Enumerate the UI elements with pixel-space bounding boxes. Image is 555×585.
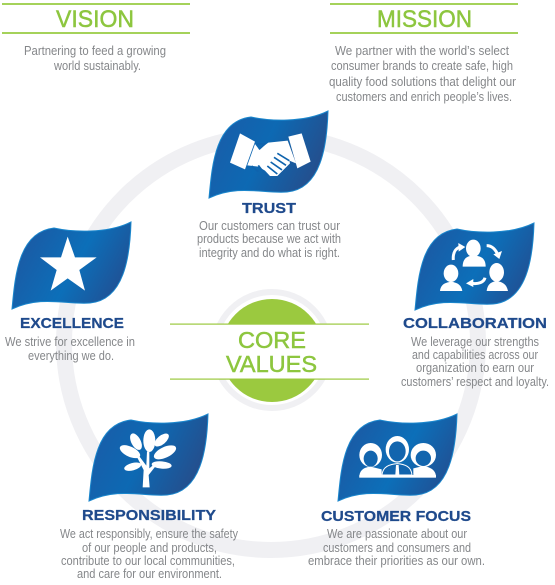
text: responsibility: of our people and products, [82,541,217,555]
background ring [64,136,478,550]
mission heading: MISSION [377,6,472,33]
text: excellence [5,335,135,363]
heading: collaboration: COLLABORATION [403,315,547,332]
text: customer focus: We are passionate about our [327,527,467,541]
text: trust: integrity and do what is right. [199,246,340,260]
icon: star [40,237,97,291]
text: collaboration: We leverage our strengths [411,335,539,349]
flag: collaboration [415,223,534,310]
text: collaboration [401,335,549,389]
text: excellence: We strive for excellence in [5,335,135,349]
panel: vision [2,3,190,73]
text: responsibility: contribute to our local communities, [61,554,235,568]
flag: responsibility [89,414,208,501]
text: customer focus [308,527,485,568]
text: trust: Our customers can trust our [199,219,340,233]
text: excellence: everything we do. [28,349,114,363]
text: responsibility: and care for our environment. [77,567,222,581]
heading: responsibility: RESPONSIBILITY [82,507,216,524]
panel: core values [170,292,369,408]
core values label [226,327,317,377]
mission text: consumer brands to create safe, high [331,59,513,73]
panel: trust [197,111,341,260]
mission text: We partner with the world’s select [335,44,509,58]
heading: trust: TRUST [242,200,296,217]
panel: customer focus [308,414,485,568]
text: trust: products because we act with [197,232,341,246]
core circle [170,292,369,408]
text: customer focus: customers and consumers and [323,541,471,555]
flag: customer focus [338,414,457,501]
panel: responsibility [60,414,239,581]
vision text [24,44,166,73]
flag: excellence [12,222,131,309]
panel: mission [329,3,518,104]
text: collaboration: organization to earn our [416,361,534,375]
icon: people with arrows [440,240,508,291]
vision text: world sustainably. [53,59,141,73]
panel: excellence [5,222,135,363]
text: responsibility [60,527,239,581]
vision text: Partnering to feed a growing [24,44,166,58]
panel: collaboration [401,223,549,389]
heading: excellence: EXCELLENCE [20,315,124,332]
icon: handshake [230,133,311,176]
icon: three customers [359,436,436,478]
flag: trust [209,111,328,198]
text: responsibility: We act responsibly, ensure the safety [60,527,239,541]
mission text: customers and enrich people’s lives. [336,90,512,104]
text: customer focus: embrace their priorities as our own. [308,554,485,568]
icon: tree [118,429,178,487]
mission text: quality food solutions that delight our [329,75,516,89]
vision heading: VISION [56,6,134,33]
heading: customer focus: CUSTOMER FOCUS [321,508,471,525]
mission text [329,44,516,104]
core values label: VALUES [226,351,317,377]
text: trust [197,219,341,260]
core values label: CORE [238,327,306,353]
